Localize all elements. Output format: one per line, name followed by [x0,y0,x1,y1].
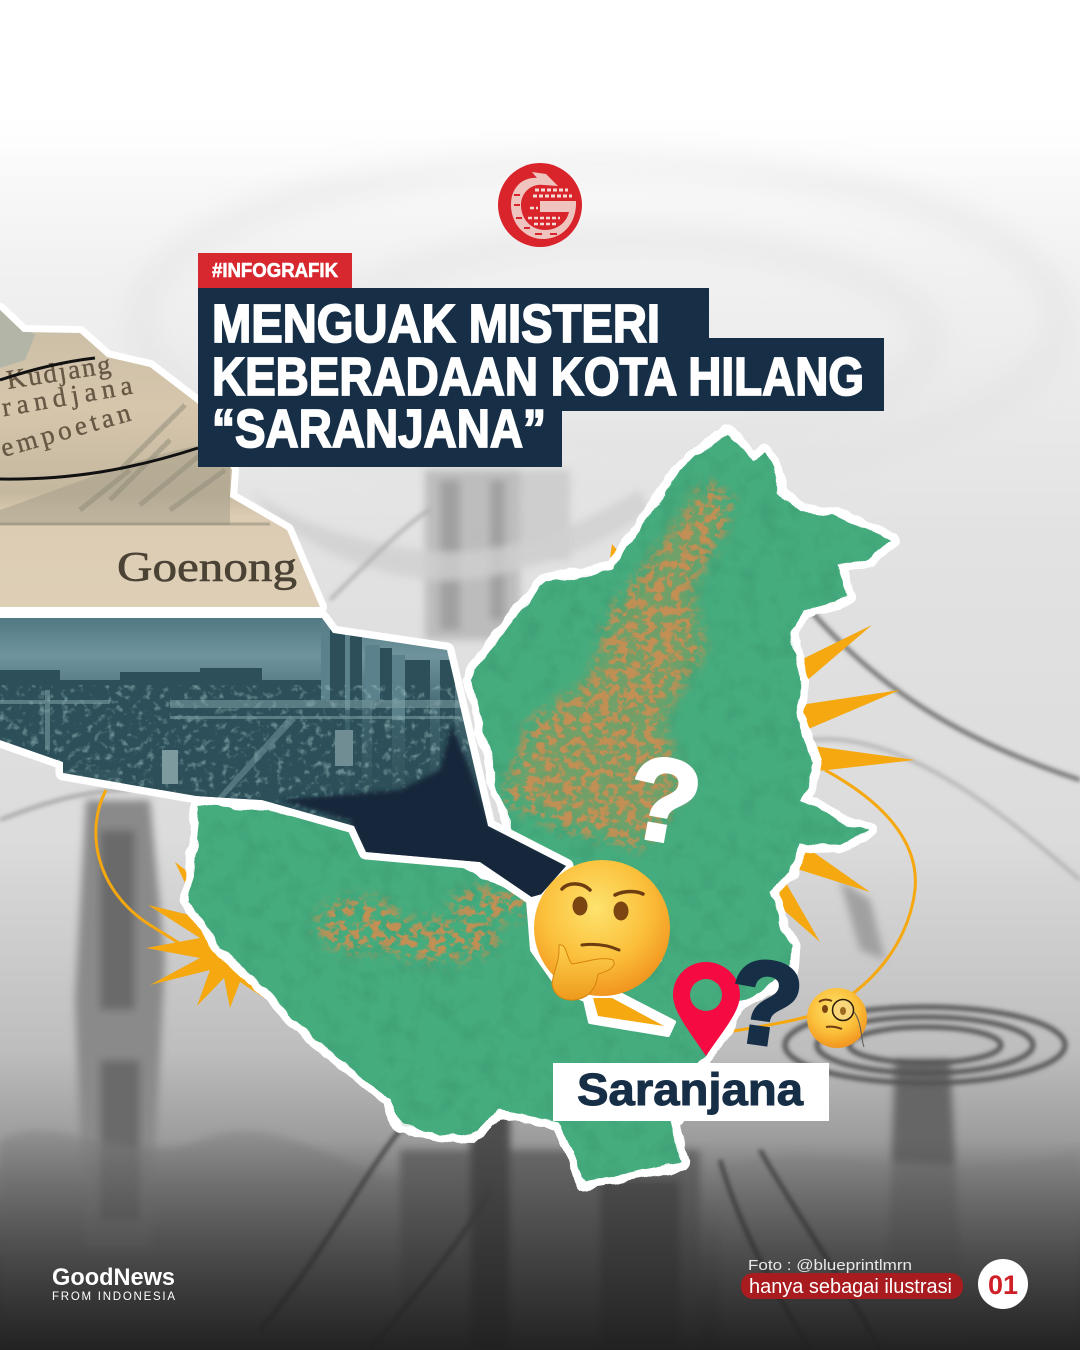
emoji: face with monocle [807,988,867,1048]
page number [978,1259,1028,1309]
tag: #INFOGRAFIK [198,253,352,288]
orange sun-burst spikes and arcs behind the island [96,544,915,1033]
map: Borneo island relief [180,420,900,1190]
location label: Saranjana: Saranjana [577,1064,804,1115]
page number: 01 [988,1270,1018,1300]
title [198,288,884,467]
photo panel: modern city skyline [0,615,580,905]
photo panel: old Dutch map fragment [0,300,340,610]
arc left [96,790,262,992]
icon: red location pin [673,962,740,1056]
left starburst [146,862,264,1008]
dark lower-right shadow [280,725,570,905]
map labels: Kudjang [4,349,115,395]
black route lines on map [0,358,95,380]
brand: GoodNews from Indonesia: FROM INDONESIA [52,1291,175,1303]
soft brown tone beneath highlands [510,490,725,840]
title: KEBERADAAN KOTA HILANG [212,347,864,407]
brand: GoodNews from Indonesia: GoodNews [52,1264,175,1291]
note pill: hanya sebagai ilustrasi: hanya sebagai ilustrasi [749,1276,952,1298]
emoji: thinking face [534,860,670,1000]
tag: #INFOGRAFIK: #INFOGRAFIK [212,260,339,282]
location label: Saranjana [553,1063,829,1121]
title: “SARANJANA” [212,399,546,459]
icon: white question mark: ? [617,730,711,872]
right spikes [500,544,915,942]
brand: GoodNews from Indonesia [52,1264,175,1303]
map label: Goenong: Goenong [117,545,297,591]
photo credit: Foto : @blueprintlmrn [748,1257,912,1274]
white notch ribbon under thinking emoji [528,880,674,1035]
logo: Good News garuda emblem [498,163,582,247]
map labels [2,359,134,456]
arc right [722,770,915,1033]
title: MENGUAK MISTERI [212,294,660,354]
terrain highlands [315,480,735,962]
icon: dark question mark: ? [721,934,810,1074]
